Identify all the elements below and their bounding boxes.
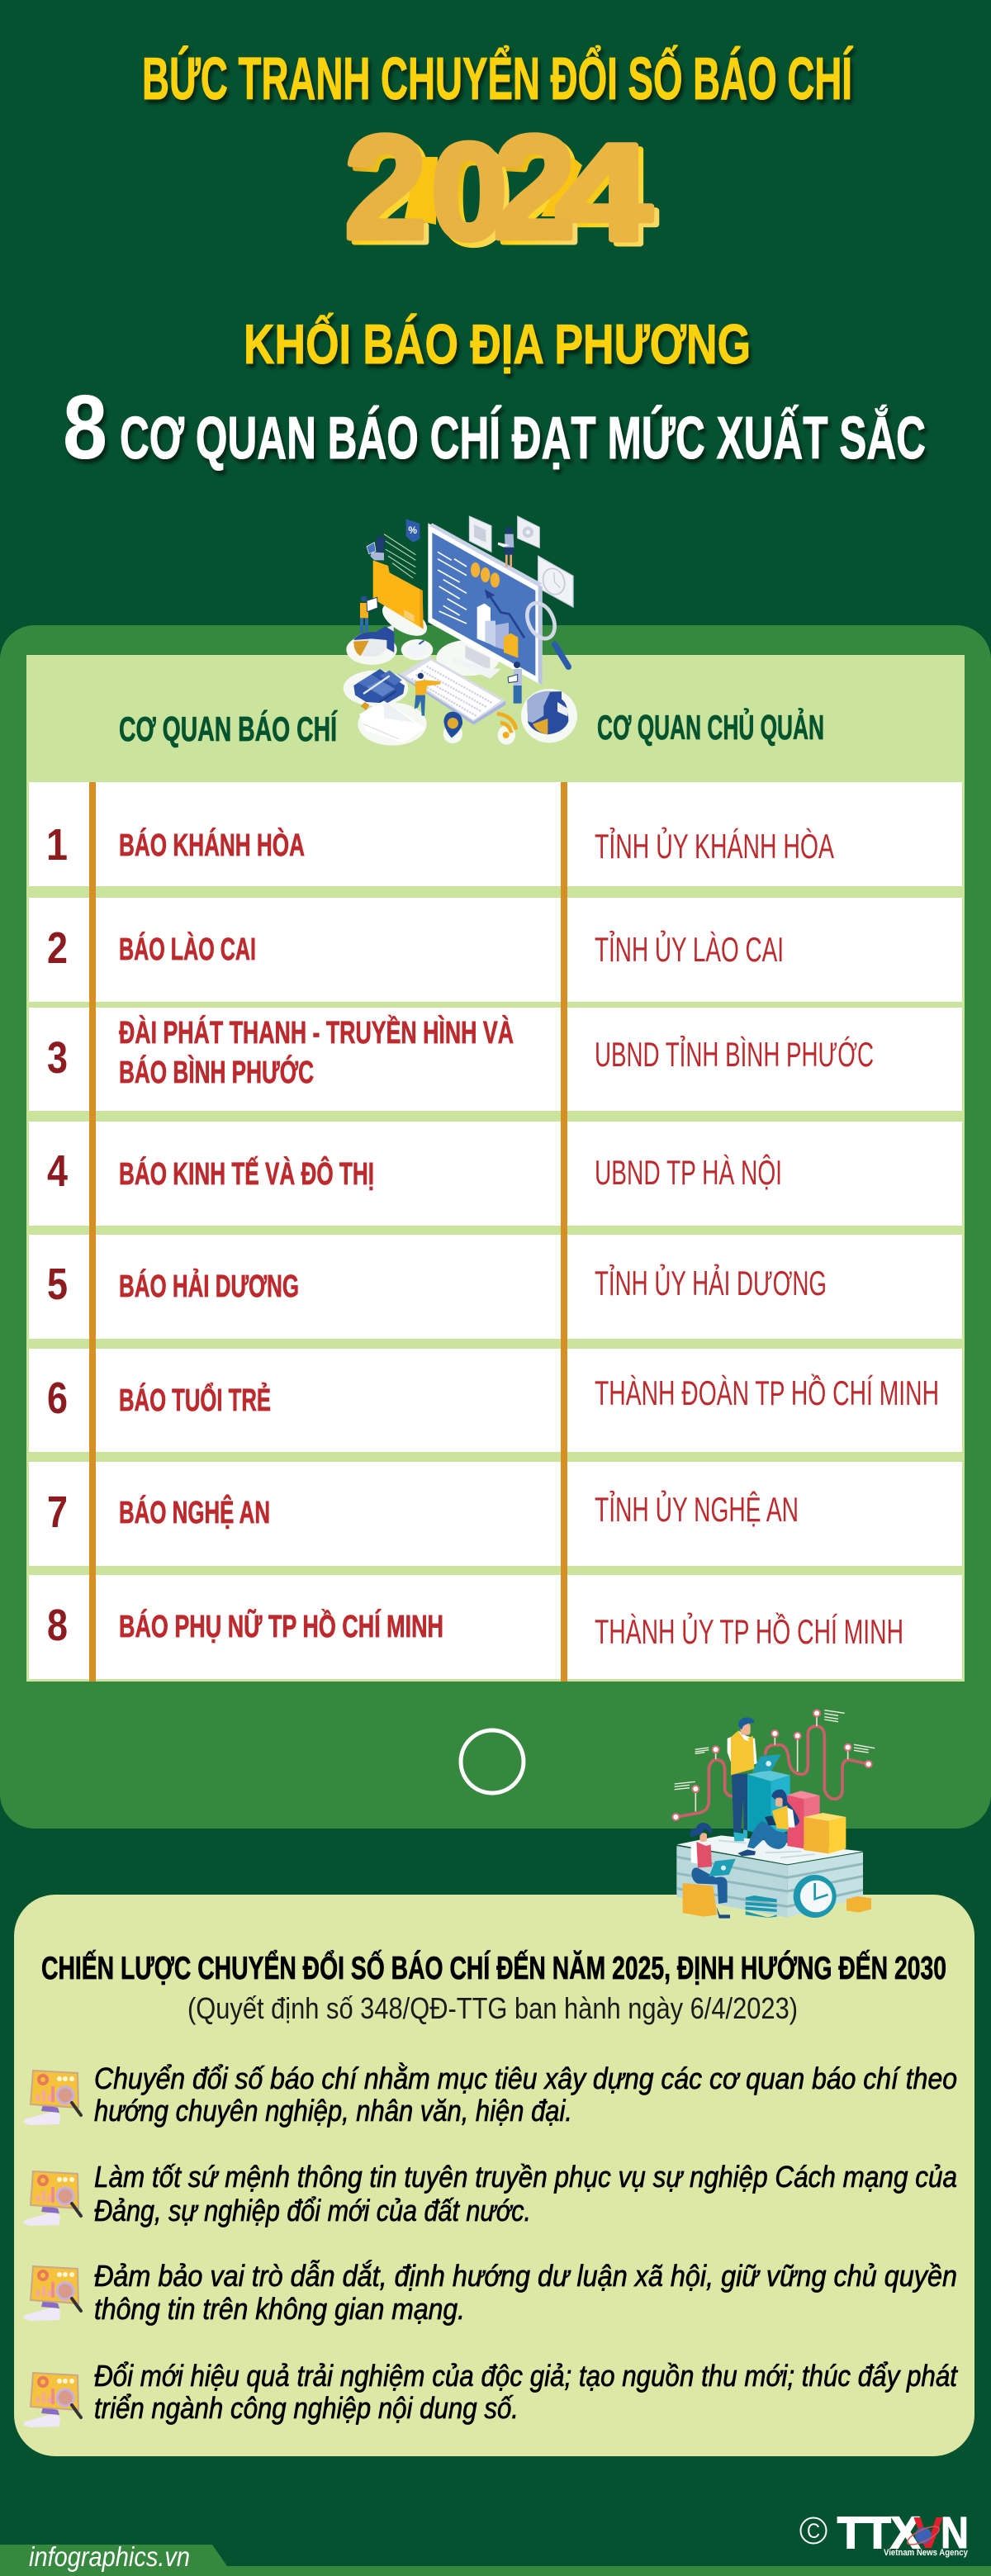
gold year 2024: 2: [349, 109, 432, 273]
row 4: BÁO KINH TẾ VÀ ĐÔ THỊ: [119, 1155, 374, 1192]
small box: [846, 1896, 871, 1913]
illustration: team with charts on paper stack: [672, 1710, 875, 1919]
logo: TTXVN: V: [913, 2508, 943, 2558]
gold year 2024: 2: [493, 105, 576, 269]
subtitle: local press block: KHỐI BÁO ĐỊA PHƯƠNG: [244, 312, 751, 376]
paper stack: [676, 1846, 787, 1918]
keyboard: [398, 657, 505, 724]
row 8: 8: [47, 1601, 68, 1650]
gold year 2024: 4: [561, 121, 657, 273]
row 8: BÁO PHỤ NỮ TP HỒ CHÍ MINH: [119, 1608, 443, 1644]
row 7: [29, 1462, 962, 1566]
person: woman top-left: [367, 536, 386, 560]
row 7: 7: [47, 1487, 68, 1537]
row 5: BÁO HẢI DƯƠNG: [119, 1268, 299, 1304]
gold year 2024: 2: [498, 109, 581, 273]
person: woman on monitor: [498, 527, 514, 567]
money stacks: [353, 669, 405, 704]
point 3: thông tin trên không gian mạng.: [94, 2292, 465, 2326]
table header: governing body: CƠ QUAN CHỦ QUẢN: [597, 707, 824, 747]
row 3: 3: [47, 1033, 68, 1083]
cards: [469, 516, 491, 552]
icon: bullet 2: [23, 2171, 81, 2226]
row 3: BÁO BÌNH PHƯỚC: [119, 1054, 314, 1090]
row 6: 6: [47, 1373, 68, 1423]
gold year 2024: [344, 105, 657, 273]
table header: press agency: CƠ QUAN BÁO CHÍ: [119, 709, 338, 748]
row 6: [29, 1349, 962, 1452]
code lines: [384, 534, 415, 578]
pie chart left: [353, 625, 394, 657]
gold year 2024: 0: [436, 121, 512, 273]
row 6: BÁO TUỔI TRẺ: [119, 1381, 271, 1418]
point 1: hướng chuyên nghiệp, nhân văn, hiện đại.: [94, 2094, 572, 2128]
gold year 2024: 2: [344, 105, 427, 269]
person: man right: [508, 662, 522, 704]
row 1: [29, 782, 962, 886]
row 5: 5: [47, 1260, 68, 1309]
icon: bullet 3: [23, 2266, 81, 2321]
column divider: number: [89, 782, 96, 1682]
mouse: [404, 637, 430, 662]
percent tag: [406, 519, 420, 543]
point 1: [94, 2061, 957, 2128]
monitor: [428, 523, 543, 686]
row 1: TỈNH ỦY KHÁNH HÒA: [595, 826, 834, 866]
headline: 8 agencies excellent: 8: [63, 377, 107, 478]
row 2: [29, 898, 962, 1002]
point 2: Đảng, sự nghiệp đổi mới của đất nước.: [94, 2194, 531, 2227]
headline: 8 agencies excellent: [63, 377, 926, 478]
row 7: BÁO NGHỆ AN: [119, 1494, 270, 1530]
logo: TTXVN: N: [941, 2508, 969, 2558]
row 4: UBND TP HÀ NỘI: [595, 1153, 782, 1192]
row 8: [29, 1575, 962, 1679]
panel: ranking table: [26, 655, 965, 1682]
point 2: [94, 2160, 957, 2227]
decorative ring: [461, 1730, 524, 1793]
person: standing man: [728, 1717, 781, 1841]
panel: strategy card: [14, 1895, 974, 2456]
footer tab: site name: infographics.vn: [29, 2541, 190, 2572]
clock: [794, 1875, 837, 1918]
magnifier: [522, 599, 560, 643]
person: man folder: [360, 595, 377, 633]
monitor stand: [465, 646, 490, 671]
icon: bullet 4: [23, 2373, 81, 2427]
white blobs: [344, 596, 577, 746]
illustration: digital newsroom computer: %: [408, 524, 417, 536]
column divider: agency: [561, 782, 567, 1682]
location pin: [443, 712, 462, 738]
pie chart right: [527, 691, 568, 734]
decision reference: (Quyết định số 348/QĐ-TTG ban hành ngày 6/4/2023): [187, 1991, 798, 2025]
bars: [747, 1774, 771, 1836]
gold year 2024: 0: [431, 116, 507, 268]
gold year 2024: 4: [556, 116, 652, 269]
row 5: [29, 1235, 962, 1339]
row 1: 1: [46, 820, 68, 870]
logo: TTXVN: [801, 2508, 969, 2558]
row 4: [29, 1122, 962, 1226]
point 3: [94, 2259, 957, 2326]
person: laptop woman: [683, 1823, 736, 1919]
row 3: [29, 1008, 962, 1111]
wifi: [497, 714, 516, 733]
row 1: BÁO KHÁNH HÒA: [119, 827, 305, 863]
logo: TTXVN: C: [807, 2520, 820, 2543]
row 5: TỈNH ỦY HẢI DƯƠNG: [595, 1263, 827, 1302]
logo: TTXVN: TTX: [837, 2508, 920, 2558]
point 4: triển ngành công nghiệp nội dung số.: [94, 2391, 519, 2425]
folder: [373, 560, 424, 629]
point 4: [94, 2359, 959, 2425]
row 2: BÁO LÀO CAI: [119, 931, 256, 967]
footer band: [0, 2566, 991, 2576]
growth line: [676, 1726, 869, 1817]
panel: green table container: [0, 625, 991, 1829]
icon: bullet 1: [23, 2071, 81, 2125]
row 2: 2: [47, 923, 68, 973]
chart nodes: [695, 1713, 848, 1811]
illustration: digital newsroom computer: [344, 516, 577, 746]
person: seated woman: [737, 1790, 799, 1856]
row 7: TỈNH ỦY NGHỆ AN: [595, 1489, 799, 1529]
row 2: TỈNH ỦY LÀO CAI: [595, 929, 784, 969]
logo: TTXVN: Vietnam News Agency: [884, 2548, 969, 2558]
row 4: 4: [47, 1146, 68, 1196]
row 3: ĐÀI PHÁT THANH - TRUYỀN HÌNH VÀ: [119, 1014, 514, 1051]
teal document stack: [746, 1895, 777, 1918]
person: man keyboard: [415, 673, 440, 716]
envelope: [359, 700, 425, 742]
